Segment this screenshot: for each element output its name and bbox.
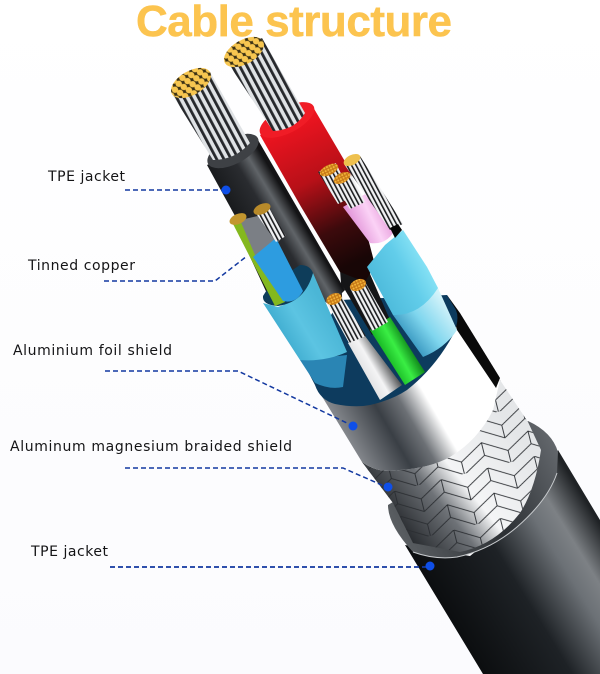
leader line (105, 371, 349, 424)
leader line (104, 256, 247, 281)
green sheath (370, 317, 425, 385)
right tube reflection (393, 288, 457, 357)
left cyan tube (228, 201, 347, 388)
pink wire strands 3 (344, 156, 403, 230)
braid weave (362, 380, 540, 550)
marker dot (348, 422, 358, 430)
inner strands (255, 206, 286, 242)
foil opening (303, 295, 457, 406)
green wire (348, 277, 425, 385)
black sheath (207, 140, 345, 305)
leader line (125, 468, 384, 486)
black wire strands (172, 72, 250, 160)
label text: Aluminum magnesium braided shield (10, 439, 292, 455)
leader line (110, 566, 426, 568)
green wire strands (350, 282, 388, 331)
marker dot (384, 482, 392, 492)
red wire copper end (224, 36, 264, 68)
strand wrap (390, 224, 402, 238)
white wire copper end (324, 291, 344, 307)
red sheath (260, 107, 375, 282)
leader line (125, 189, 222, 191)
right cyan tube (318, 151, 457, 357)
black sheath end (207, 134, 259, 168)
braid base (362, 380, 541, 552)
label: Tinned copper (27, 256, 247, 281)
label text: TPE jacket (30, 544, 108, 560)
aluminium foil shield (315, 382, 496, 471)
marker dot (222, 186, 230, 194)
right edge black strip (447, 295, 500, 388)
red wire (219, 31, 375, 282)
aluminum magnesium braided shield (362, 380, 541, 552)
grey inner wire (241, 216, 280, 256)
outer TPE jacket (405, 450, 600, 674)
label: TPE jacket (outer) (30, 544, 434, 570)
white wire (324, 291, 402, 400)
right tube body (367, 230, 438, 315)
green inner wire (232, 218, 285, 306)
label text: Aluminium foil shield (13, 343, 172, 359)
copper end 1 (320, 164, 338, 176)
left tube body (263, 273, 347, 360)
black wire (166, 62, 345, 305)
label text: TPE jacket (47, 169, 126, 185)
red sheath end (260, 102, 314, 138)
pink wire strands 1 (318, 163, 345, 204)
green wire copper end (348, 277, 368, 293)
red wire strands (226, 38, 305, 131)
white sheath (348, 336, 402, 400)
inner dark backing (249, 255, 389, 335)
cable illustration (166, 31, 600, 674)
marker dot (426, 562, 434, 570)
jacket collar (388, 421, 558, 558)
copper end 3 (344, 154, 360, 166)
white wire strands (327, 297, 366, 343)
left tube lower section (300, 355, 347, 388)
pink wire (343, 193, 393, 243)
label: TPE jacket (inner) (47, 169, 230, 194)
label: Aluminum magnesium braided shield (10, 439, 392, 492)
copper end 2 (334, 172, 350, 184)
tube opening (263, 265, 313, 306)
label: Aluminium foil shield (13, 343, 358, 430)
label text: Tinned copper (27, 258, 135, 274)
jacket rim highlight (413, 473, 557, 558)
inner copper end 2 (252, 201, 272, 217)
blue inner wire (253, 238, 303, 302)
black wire copper end (171, 68, 211, 98)
inner copper end 1 (228, 211, 248, 227)
pink wire strands 2 (344, 173, 365, 209)
